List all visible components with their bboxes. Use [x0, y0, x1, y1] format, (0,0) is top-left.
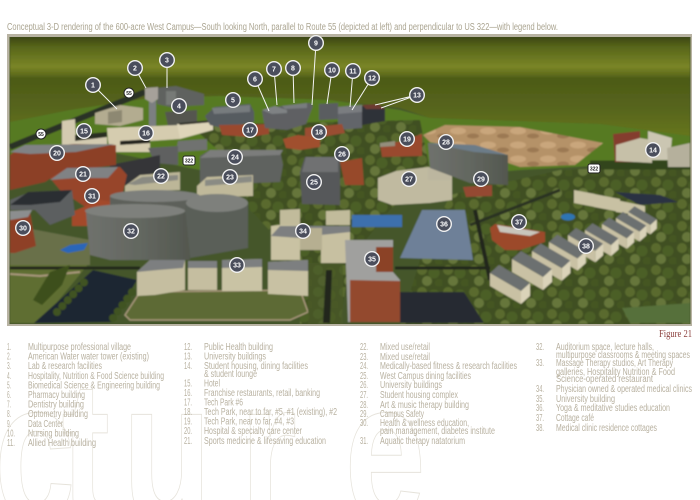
marker 14: 14	[649, 148, 657, 154]
marker 36: 36	[440, 222, 448, 228]
marker 28	[439, 135, 453, 149]
marker 21: 21	[79, 172, 87, 178]
legend column 1: Dentistry building	[28, 400, 84, 411]
panel: campus map frame	[7, 34, 692, 326]
building 17	[219, 124, 269, 137]
marker 1	[86, 78, 100, 92]
legend column 2	[184, 342, 337, 447]
legend column 1: Multipurpose professional village	[28, 342, 131, 353]
legend column 3: 30.	[360, 418, 368, 429]
marker 37: 37	[515, 220, 523, 226]
marker 19	[400, 132, 414, 146]
legend column 1: Data Center	[28, 419, 63, 430]
legend column 3: Art & music therapy building	[380, 400, 469, 411]
legend column 3: 27.	[360, 390, 368, 401]
legend column 2: & student lounge	[204, 369, 257, 380]
legend column 2: 13.	[184, 352, 192, 363]
marker 19: 19	[403, 136, 411, 144]
marker 31	[85, 189, 99, 203]
lawn with paths left of auditorium	[10, 225, 90, 265]
legend column 2: 12.	[184, 342, 192, 353]
legend column 4: Cottage café	[556, 413, 594, 424]
marker 31: 31	[88, 194, 96, 200]
building 15	[62, 119, 107, 147]
legend column 1: 5.	[7, 380, 11, 391]
route 55 sign: 55	[126, 91, 132, 97]
marker 34: 34	[299, 228, 307, 236]
legend column 4: 33.	[536, 358, 544, 369]
dark reflecting pool right	[400, 292, 484, 323]
marker 12	[365, 71, 379, 85]
legend column 2: 17.	[184, 397, 192, 408]
legend column 1: 6.	[7, 390, 11, 401]
legend column 1: 7.	[7, 400, 11, 411]
building 34	[271, 209, 350, 263]
legend column 1: Biomedical Science & Engineering building	[28, 380, 160, 391]
small pond	[561, 214, 575, 220]
legend column 2: Tech Park, near to far, #4, #3	[204, 417, 294, 428]
building 26	[340, 158, 364, 185]
legend column 3: Mixed use/retail	[380, 342, 430, 353]
building 5	[205, 104, 254, 128]
marker 24	[228, 150, 242, 164]
marker 11	[346, 64, 360, 78]
marker 36	[437, 217, 451, 231]
marker 11: 11	[349, 68, 357, 76]
legend column 4: 36.	[536, 403, 544, 414]
marker 22: 22	[157, 174, 165, 180]
marker 13	[410, 88, 424, 102]
legend column 4	[536, 342, 692, 434]
marker 21	[76, 167, 90, 181]
legend column 3: 29.	[360, 409, 368, 420]
marker 32: 32	[127, 228, 135, 236]
marker 10	[325, 63, 339, 77]
marker 18	[312, 125, 326, 139]
marker 8: 8	[291, 66, 295, 72]
map artwork	[10, 37, 690, 324]
forest ground right	[400, 165, 690, 324]
marker 26	[335, 147, 349, 161]
marker 23	[223, 170, 237, 184]
marker 27: 27	[405, 176, 413, 184]
marker 16	[139, 126, 153, 140]
legend column 4: Auditorium space, lecture halls,	[556, 342, 654, 353]
legend column 1: 4.	[7, 371, 11, 382]
cottages 38 row	[490, 206, 657, 304]
legend column 3: 23.	[360, 352, 368, 363]
marker 25	[307, 175, 321, 189]
marker 29: 29	[477, 176, 485, 184]
legend column 4: 32.	[536, 342, 544, 353]
legend column 3: University buildings	[380, 380, 442, 391]
legend column 4: Science-operated restaurant	[556, 374, 653, 385]
buildings 6 7 8	[262, 103, 313, 130]
marker 6	[248, 72, 262, 86]
legend column 1: American Water water tower (existing)	[28, 352, 149, 363]
building 37 cafe	[490, 224, 545, 250]
legend column 3: 24.	[360, 361, 368, 372]
legend column 4: 35.	[536, 394, 544, 405]
legend column 2: Tech Park, near to far, #5, #1 (existing), #2	[204, 407, 337, 418]
marker 8	[286, 61, 300, 75]
dirt construction site	[423, 125, 603, 167]
legend column 2: Hospital & specialty care center	[204, 426, 302, 437]
marker 20	[50, 146, 64, 160]
water tower	[145, 87, 158, 130]
marker 15	[77, 124, 91, 138]
route 322 sign	[183, 156, 195, 165]
building 23	[197, 175, 253, 197]
upper cottages	[574, 190, 645, 216]
large tree left	[33, 265, 70, 305]
lower left lawn	[10, 262, 90, 323]
leader lines	[93, 43, 417, 111]
dark building near 20	[110, 155, 160, 185]
building 1	[95, 105, 143, 126]
marker 27	[402, 172, 416, 186]
building 30	[10, 210, 36, 253]
road right	[395, 266, 490, 270]
legend column 2: 21.	[184, 436, 192, 447]
legend column 3: Health & wellness education,	[380, 418, 469, 429]
legend column 1: 10.	[7, 428, 15, 439]
marker 17: 17	[246, 128, 254, 134]
route 55 sign	[36, 129, 46, 139]
marker 5	[226, 93, 240, 107]
farm field background	[10, 37, 690, 136]
legend column 4: 38.	[536, 423, 544, 434]
legend column 1: 8.	[7, 409, 11, 420]
buildings 10 11 12	[319, 103, 362, 130]
legend column 2: Public Health building	[204, 342, 273, 353]
marker 6: 6	[253, 76, 257, 84]
legend column 4: 37.	[536, 413, 544, 424]
marker 2: 2	[133, 66, 137, 72]
marker 30	[16, 221, 30, 235]
building 28 glass	[428, 143, 508, 185]
legend column 1: Nursing building	[28, 428, 79, 439]
tan path lower left	[10, 272, 80, 276]
legend column 3: 28.	[360, 400, 368, 411]
marker 35: 35	[368, 256, 376, 264]
forest ground middle	[190, 120, 430, 324]
small grey blocks 22 area	[148, 139, 207, 165]
trees along pool	[57, 278, 135, 318]
legend column 2: Tech Park #6	[204, 397, 243, 408]
marker 15: 15	[80, 128, 88, 136]
marker 32	[124, 224, 138, 238]
tree line top right	[590, 160, 690, 170]
building 3	[157, 86, 204, 107]
marker 20: 20	[53, 150, 61, 158]
legend column 3: West Campus dining facilities	[380, 371, 471, 382]
legend column 3: pain management, diabetes institute	[380, 426, 495, 437]
building 18	[283, 124, 345, 150]
front lawn	[125, 290, 308, 320]
building 13	[362, 104, 385, 125]
building 36 blue roof	[400, 210, 473, 260]
building 33	[137, 259, 308, 296]
legend column 3: Campus Safety	[380, 409, 424, 420]
route 55 sign	[124, 88, 134, 98]
legend column 1: Pharmacy building	[28, 390, 85, 401]
legend column 2: 18.	[184, 407, 192, 418]
marker 29	[474, 172, 488, 186]
marker 14	[646, 143, 660, 157]
marker 23: 23	[226, 174, 234, 182]
building 25	[300, 157, 340, 205]
legend column 1: 3.	[7, 361, 11, 372]
legend column 4: 34.	[536, 384, 544, 395]
route 55 sign: 55	[38, 132, 44, 138]
legend column 1: 11.	[7, 438, 15, 449]
legend column 3: 26.	[360, 380, 368, 391]
building 24	[200, 150, 283, 185]
legend column 3: Aquatic therapy natatorium	[380, 436, 465, 447]
legend column 2: 15.	[184, 378, 192, 389]
marker 38: 38	[582, 244, 590, 250]
marker 26: 26	[338, 152, 346, 158]
legend column 1: Hospitality, Nutrition & Food Science building	[28, 371, 164, 382]
building 35	[345, 240, 400, 322]
marker 5: 5	[231, 98, 235, 104]
marker 30: 30	[19, 226, 27, 232]
building 16	[107, 120, 213, 152]
legend column 1: Lab & research facilities	[28, 361, 102, 372]
marker 22	[154, 169, 168, 183]
marker 33	[230, 258, 244, 272]
legend column 2: Franchise restaurants, retail, banking	[204, 388, 320, 399]
marker 2	[128, 61, 142, 75]
marker 28: 28	[442, 140, 450, 146]
marker 16: 16	[142, 130, 150, 138]
legend column 2: 20.	[184, 426, 192, 437]
legend column 4: Medical clinic residence cottages	[556, 423, 657, 434]
ground below buildings	[308, 263, 343, 324]
marker 3: 3	[165, 58, 169, 64]
building 21	[50, 167, 127, 210]
marker 9: 9	[314, 40, 318, 48]
pond by auditorium	[60, 243, 88, 253]
marker 3	[160, 53, 174, 67]
marker 17	[243, 123, 257, 137]
green lawn strip	[10, 96, 690, 180]
legend column 3: 25.	[360, 371, 368, 382]
marker 7	[267, 62, 281, 76]
building 20	[10, 144, 116, 190]
marker 7: 7	[272, 66, 276, 74]
marker 38	[579, 239, 593, 253]
marker 18: 18	[315, 130, 323, 136]
building 4	[165, 110, 197, 126]
legend column 2: 16.	[184, 388, 192, 399]
legend column 3: Medically-based fitness & research facilities	[380, 361, 517, 372]
Route 55 road	[10, 92, 145, 147]
building 19	[380, 134, 422, 157]
route 322 sign: 322	[590, 166, 598, 172]
legend column 2: Student housing, dining facilities	[204, 361, 308, 372]
marker 37	[512, 215, 526, 229]
marker 9	[309, 36, 323, 50]
legend column 2: 19.	[184, 417, 192, 428]
marker 4: 4	[177, 104, 181, 110]
legend column 1: 2.	[7, 352, 11, 363]
legend column 3	[360, 342, 517, 447]
marker 13: 13	[413, 92, 421, 100]
building 29	[463, 185, 492, 197]
legend column 2: Hotel	[204, 378, 220, 389]
building: far cream cluster 14	[613, 131, 690, 167]
legend column 1: Optometry building	[28, 409, 88, 420]
marker 25: 25	[310, 180, 318, 186]
marker 12: 12	[368, 76, 376, 82]
legend column 1: 9.	[7, 419, 11, 430]
building 22	[125, 172, 180, 192]
building 27	[378, 167, 452, 205]
legend column 1	[7, 342, 164, 449]
road left	[10, 266, 140, 270]
marker 4	[172, 99, 186, 113]
legend column 2: Sports medicine & lifesaving education	[204, 436, 326, 447]
legend column 1: Allied Health building	[28, 438, 96, 449]
legend column 1: 1.	[7, 342, 11, 353]
marker 1: 1	[91, 82, 95, 90]
legend column 2: 14.	[184, 361, 192, 372]
lawn lower right	[622, 303, 690, 323]
building 31	[72, 200, 120, 226]
marker 35	[365, 252, 379, 266]
route 322 sign: 322	[185, 158, 193, 164]
marker 33: 33	[233, 262, 241, 270]
dark reflecting pool left	[34, 270, 137, 323]
blue pond	[352, 215, 402, 227]
legend column 3: Mixed use/retail	[380, 352, 430, 363]
route 322 sign	[588, 164, 600, 173]
marker 10: 10	[328, 68, 336, 74]
marker 24: 24	[231, 154, 239, 162]
marker 34	[296, 224, 310, 238]
legend column 3: 22.	[360, 342, 368, 353]
legend column 2: University buildings	[204, 352, 266, 363]
road centre right	[323, 270, 332, 323]
dark pool behind cottages	[615, 192, 678, 205]
legend column 4: University building	[556, 394, 615, 405]
dark building near 30	[10, 190, 75, 225]
legend column 3: 31.	[360, 436, 368, 447]
legend column 3: Student housing complex	[380, 390, 458, 401]
figure label: Figure 21	[659, 329, 692, 340]
building 32 glass auditorium	[85, 190, 248, 260]
